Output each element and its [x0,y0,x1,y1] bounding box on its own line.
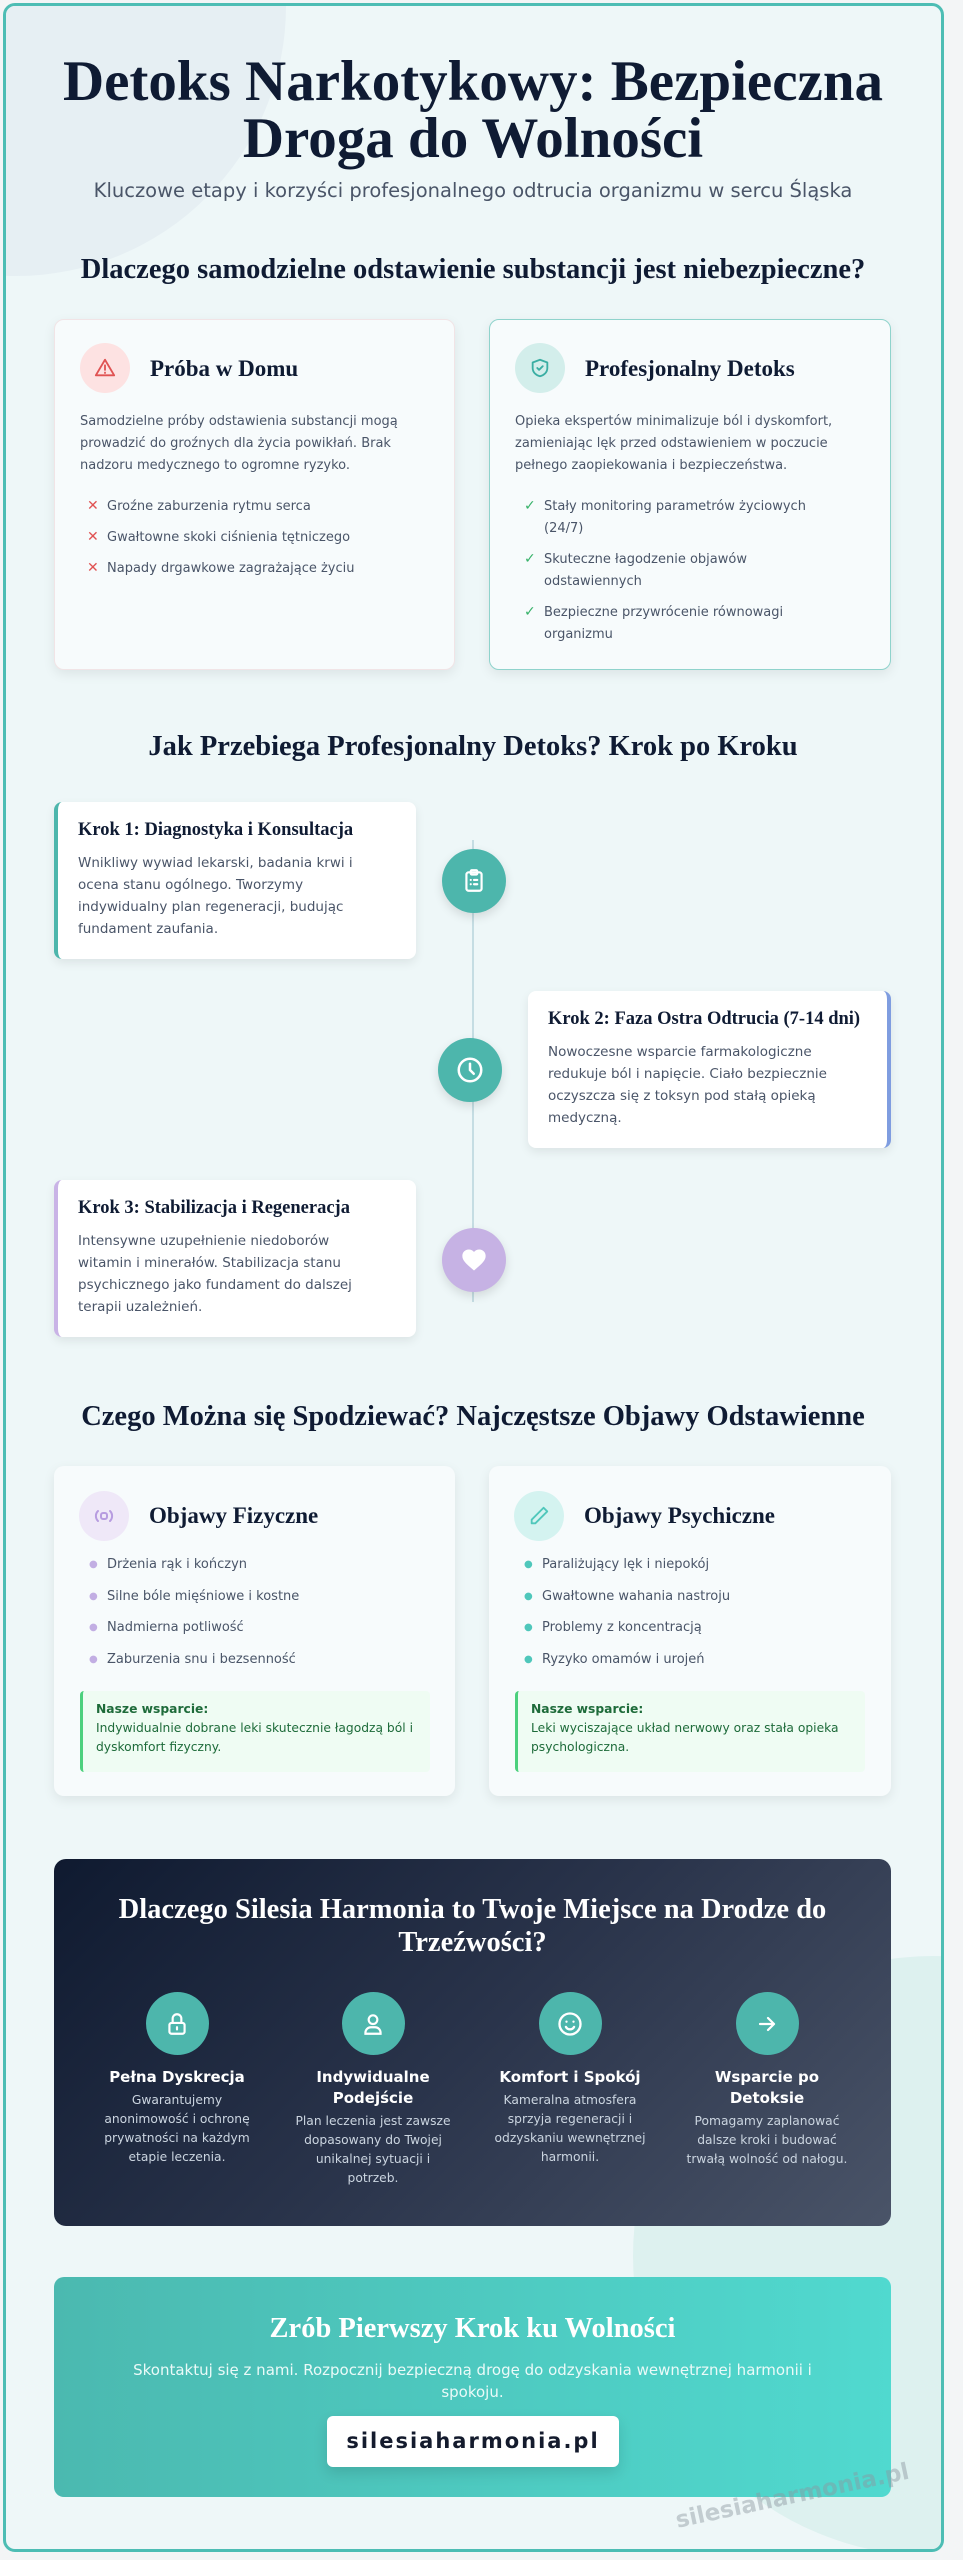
feature: comfort: sprzyja regeneracji i [508,2112,632,2126]
panel: home attempt: ✕ [87,529,99,545]
dark panel title: Trzeźwości? [398,1927,547,1958]
feature: after-detox support: Wsparcie po [715,2068,819,2086]
timeline line [472,840,474,1302]
CTA title: Zrób Pierwszy Krok ku Wolności [270,2313,675,2344]
feature: individual approach: potrzeb. [348,2171,398,2185]
feature: comfort [495,1992,645,2164]
feature: discretion: Pełna Dyskrecja [109,2068,245,2086]
callout: support: Nasze wsparcie: [531,1702,643,1716]
icon: vibration [79,1491,129,1541]
feature: discretion [104,1992,250,2164]
panel: professional detox: ✓ [524,498,536,514]
panel: physical symptoms: ● [89,1654,98,1664]
panel: physical symptoms: ● [89,1559,98,1570]
symptom list: Nadmierna potliwość [107,1620,244,1635]
panel: psychological symptoms: ● [524,1654,533,1664]
risk list: Napady drgawkowe zagrażające życiu [107,561,355,576]
symptom list: Zaburzenia snu i bezsenność [107,1652,296,1666]
risk list: Gwałtowne skoki ciśnienia tętniczego [107,530,350,545]
callout: support: Indywidualnie dobrane leki skutecznie łagodzą ból i dyskomfort fizyczny. [96,1721,413,1754]
panel: physical symptoms: ● [89,1622,98,1633]
risk list: Groźne zaburzenia rytmu serca [107,499,311,514]
step 1 card: Wnikliwy wywiad lekarski, badania krwi i ocena stanu ogólnego. Tworzymy indywidualny plan regeneracji, budując fundament zaufania. [78,855,353,937]
symptom list: Paraliżujący lęk i niepokój [542,1557,709,1572]
feature: after-detox support: Detoksie [730,2089,804,2107]
feature: individual approach: Podejście [333,2089,413,2107]
card text: Opieka ekspertów minimalizuje ból i dyskomfort, zamieniając lęk przed odstawieniem w poczucie pełnego zaopiekowania i bezpieczeństwa. [515,414,832,473]
CTA button [327,2416,619,2467]
benefit list: Skuteczne łagodzenie objawów odstawiennych [544,552,747,588]
decorative circle bottom-right [633,1956,963,2556]
callout: support: Nasze wsparcie: [96,1702,208,1716]
card title: Próba w Domu [150,356,298,381]
feature: after-detox support: trwałą wolność od nałogu. [687,2152,847,2166]
feature: individual approach: Indywidualne [316,2068,430,2086]
icon: clock [438,1038,502,1102]
icon: warning [80,343,130,393]
decorative circle top-left [0,0,286,276]
step 3 card [54,1180,416,1337]
feature: after-detox support: dalsze kroki i budować [697,2133,837,2147]
feature: individual approach: Plan leczenia jest zawsze [295,2114,451,2128]
feature: comfort: odzyskaniu wewnętrznej [495,2131,645,2145]
icon: user [342,1992,404,2055]
heading: symptoms: Czego Można się Spodziewać? Najczęstsze Objawy Odstawienne [81,1401,865,1432]
panel: professional detox [489,319,891,670]
watermark: silesiaharmonia.pl [673,2459,912,2534]
callout: support [80,1691,430,1772]
symptom list: Drżenia rąk i kończyn [107,1557,247,1572]
panel: why Silesia Harmonia [54,1859,891,2226]
panel: home attempt [54,319,455,670]
symptom list: Problemy z koncentracją [542,1620,702,1635]
callout: support: Leki wyciszające układ nerwowy oraz stała opieka psychologiczna. [531,1721,839,1754]
feature: comfort: Komfort i Spokój [499,2068,641,2086]
step 2 card [528,991,891,1148]
benefit list [524,498,806,642]
step 3 card: Krok 3: Stabilizacja i Regeneracja [78,1198,350,1218]
symptom list: Gwałtowne wahania nastroju [542,1588,730,1604]
feature: after-detox support: Pomagamy zaplanować [695,2114,839,2128]
title: Detoks Narkotykowy: Bezpieczna [63,50,883,113]
panel: home attempt: ✕ [87,498,99,514]
icon: pencil [514,1491,564,1541]
panel: psychological symptoms: ● [524,1559,533,1570]
title [63,50,883,170]
icon: arrow [736,1992,798,2055]
icon: smile [538,1992,602,2055]
panel: home attempt: ✕ [87,560,99,576]
panel: call to action [54,2277,891,2497]
panel: professional detox: ✓ [524,551,536,567]
symptom list: Ryzyko omamów i urojeń [542,1652,704,1666]
panel: psychological symptoms: ● [524,1590,533,1602]
feature: discretion: etapie leczenia. [128,2150,226,2164]
benefit list: Bezpieczne przywrócenie równowagi organizmu [544,605,783,642]
dark panel title [119,1894,826,1958]
heading: steps: Jak Przebiega Profesjonalny Detoks? Krok po Kroku [148,731,798,762]
icon: lock [146,1992,208,2055]
card title: Objawy Psychiczne [584,1503,775,1528]
step 1 card: Krok 1: Diagnostyka i Konsultacja [78,820,353,840]
step 2 card: Nowoczesne wsparcie farmakologiczne redukuje ból i napięcie. Ciało bezpiecznie oczyszcza się z toksyn pod stałą opieką medyczną. [548,1044,827,1126]
benefit list: Stały monitoring parametrów życiowych (24/7) [544,499,806,536]
panel: physical symptoms: ● [89,1590,98,1602]
subtitle: Kluczowe etapy i korzyści profesjonalnego odtrucia organizmu w sercu Śląska [94,179,852,202]
card title: Objawy Fizyczne [149,1503,318,1528]
risk list [87,498,355,576]
panel: psychological symptoms: ● [524,1622,533,1633]
feature: after-detox support [686,1992,847,2166]
feature: discretion: anonimowość i ochronę [104,2112,250,2126]
step 2 card: Krok 2: Faza Ostra Odtrucia (7-14 dni) [548,1009,860,1029]
panel: psychological symptoms [489,1466,891,1796]
icon: shield [515,343,565,393]
feature: discretion: prywatności na każdym [104,2131,250,2145]
icon: clipboard [442,849,506,913]
step 1 card [54,802,416,959]
feature: individual approach: unikalnej sytuacji i [316,2152,430,2166]
feature: individual approach [295,1992,451,2185]
CTA button: silesiaharmonia.pl [346,2429,600,2453]
panel: physical symptoms [54,1466,455,1796]
feature: comfort: Kameralna atmosfera [504,2093,636,2107]
symptom list [524,1557,730,1666]
CTA text: Skontaktuj się z nami. Rozpocznij bezpieczną drogę do odzyskania wewnętrznej harmonii i spokoju. [133,2361,812,2401]
icon: heart [442,1228,506,1292]
feature: individual approach: dopasowany do Twojej [304,2133,442,2147]
card text: Samodzielne próby odstawienia substancji mogą prowadzić do groźnych dla życia powikłań. Brak nadzoru medycznego to ogromne ryzyko. [80,414,398,473]
dark panel title: Dlaczego Silesia Harmonia to Twoje Miejsce na Drodze do [119,1894,826,1925]
feature: comfort: harmonii. [541,2150,599,2164]
step 3 card: Intensywne uzupełnienie niedoborów witamin i minerałów. Stabilizacja stanu psychicznego jako fundament do dalszej terapii uzależnień. [78,1233,352,1315]
panel: professional detox: ✓ [524,604,536,620]
title: Droga do Wolności [243,107,703,170]
callout: support [515,1691,865,1772]
symptom list [89,1557,299,1666]
feature: discretion: Gwarantujemy [132,2093,222,2107]
card title: Profesjonalny Detoks [585,356,795,381]
symptom list: Silne bóle mięśniowe i kostne [107,1588,299,1604]
heading: dangers: Dlaczego samodzielne odstawienie substancji jest niebezpieczne? [81,254,865,285]
